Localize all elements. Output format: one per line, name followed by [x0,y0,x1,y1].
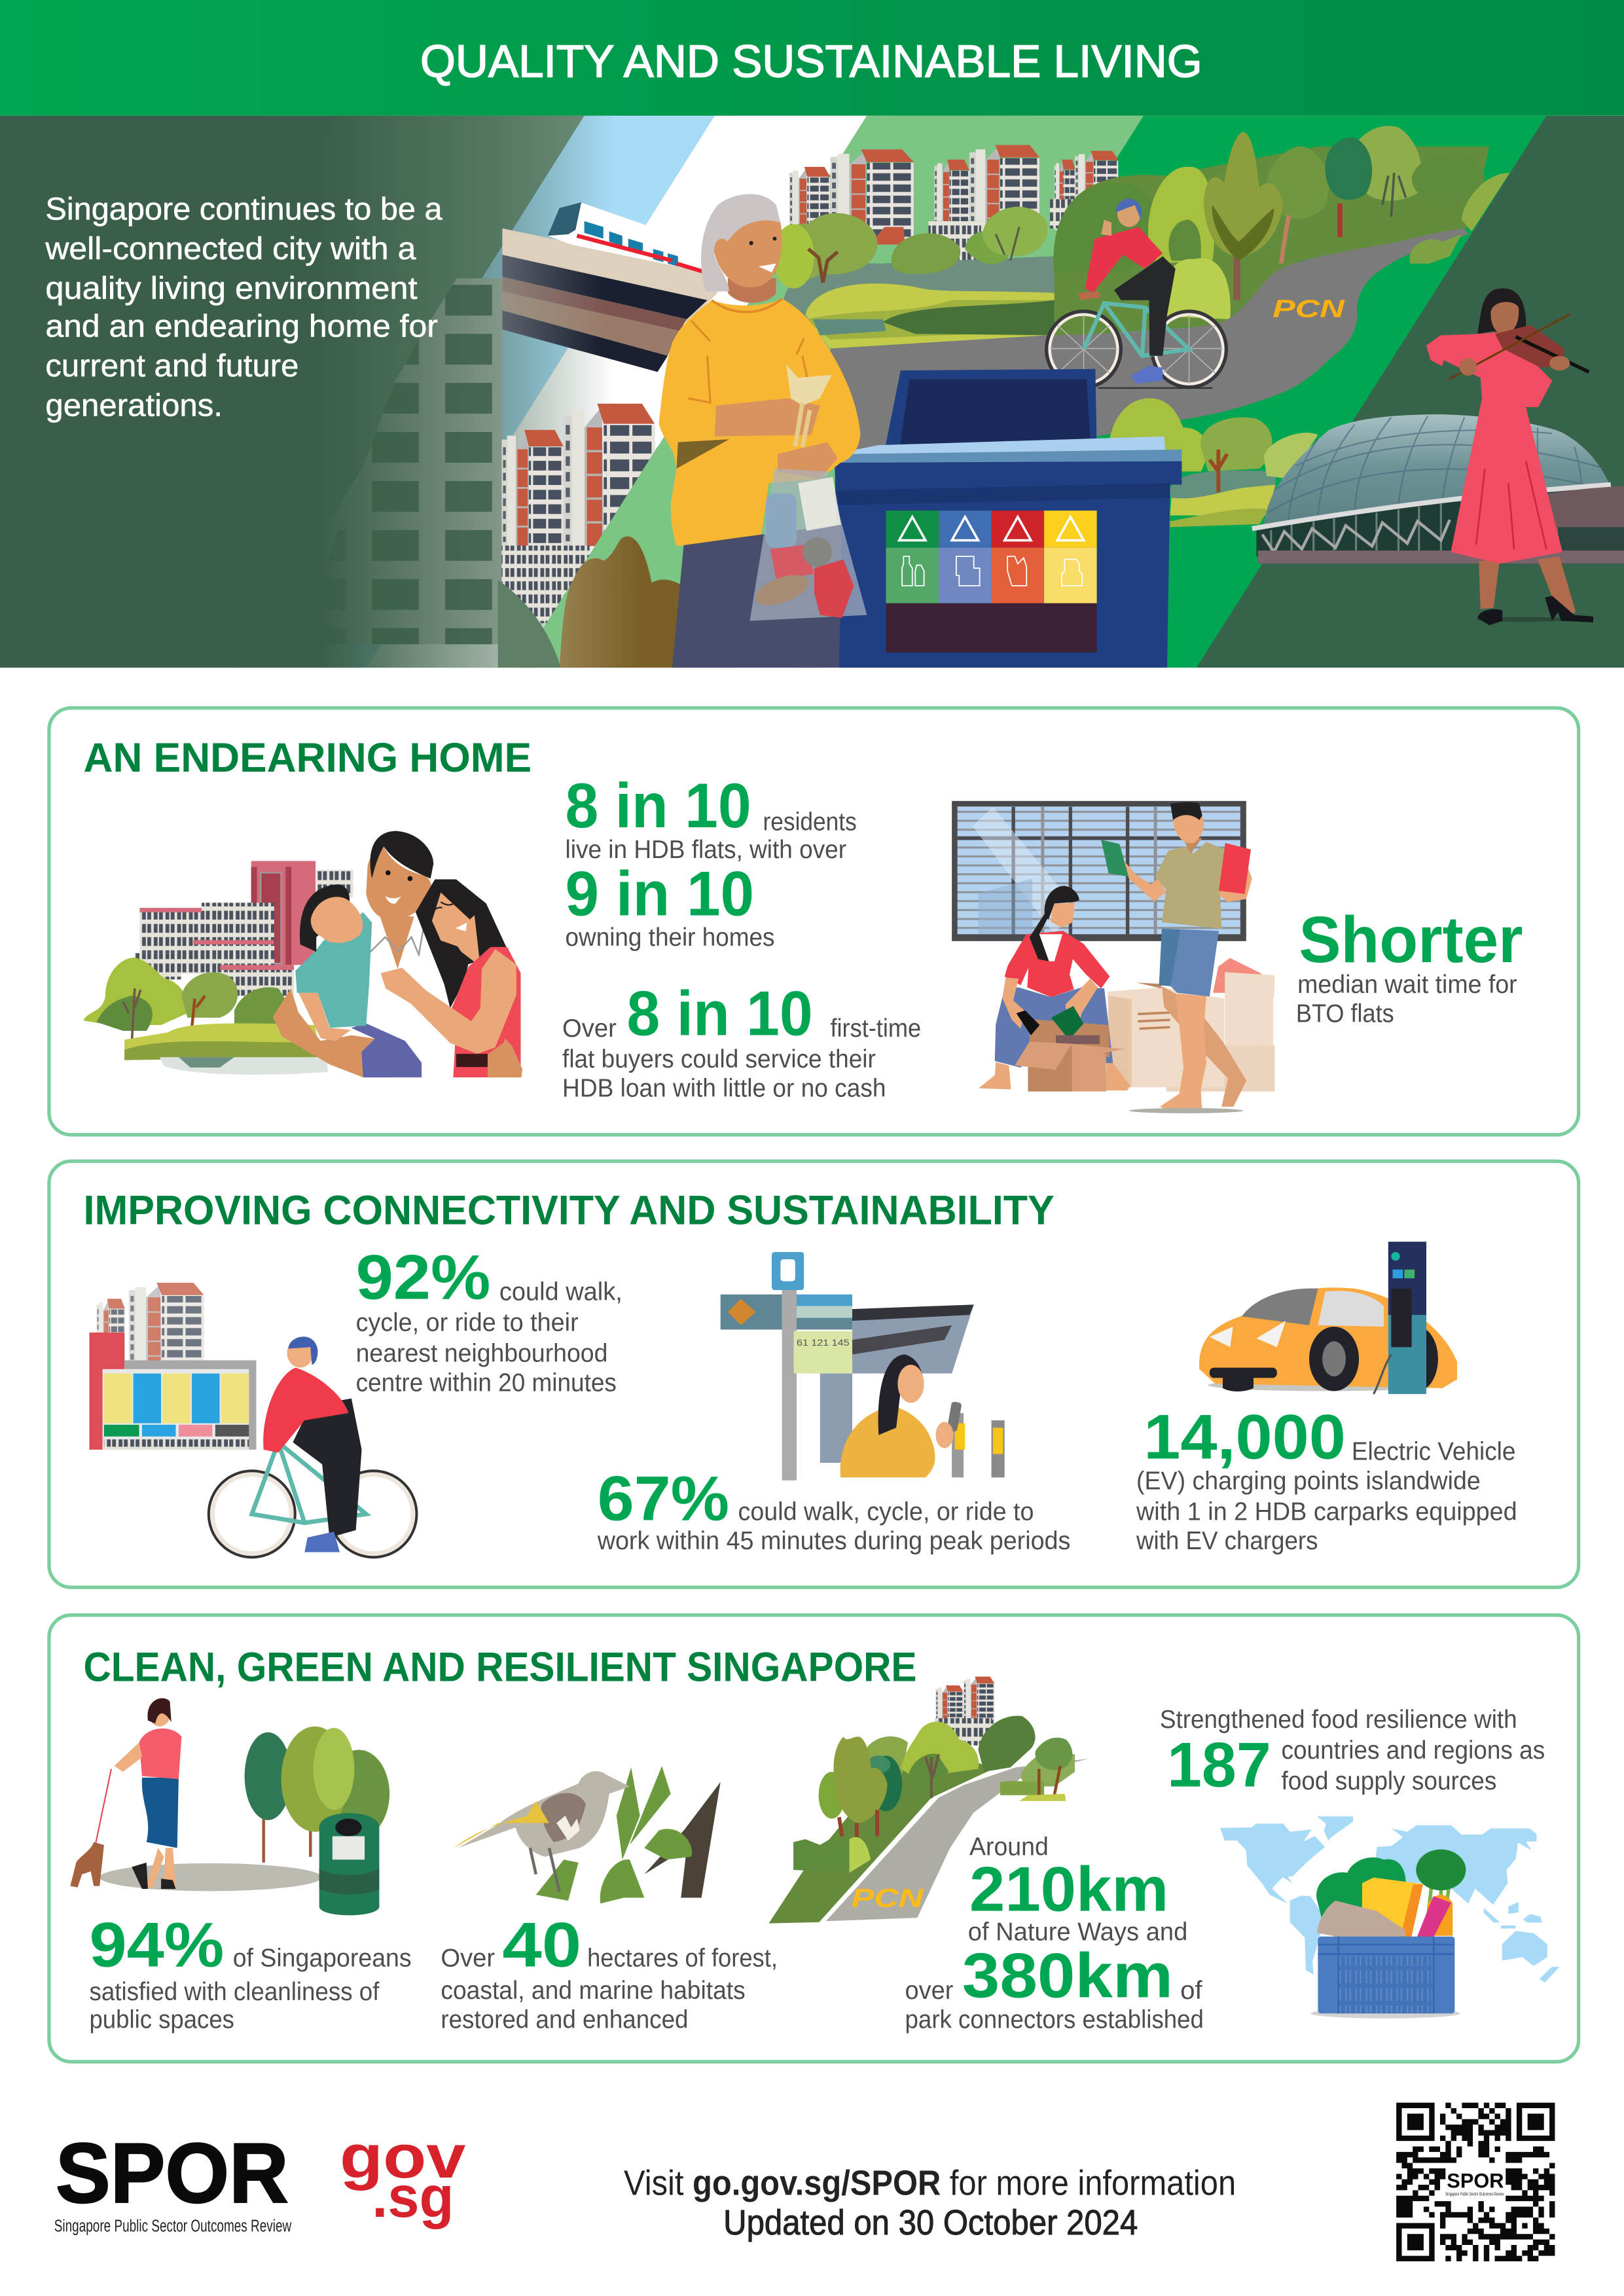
illustration: bus stop and commuter [721,1252,1005,1480]
cyclist on road [1047,199,1225,388]
stat: over 8 in 10 first-time buyers [562,979,921,1103]
panel: improving connectivity and sustainability [49,1161,1579,1587]
stat: 8 in 10 residents: 8 in 10 [566,771,751,841]
stat: 67%: 67% [598,1463,729,1534]
stat: 67%: work within 45 minutes during peak periods [597,1527,1070,1555]
logo: gov.sg: .sg [372,2164,454,2229]
heading: clean, green and resilient: CLEAN, GREEN AND RESILIENT SINGAPORE [84,1644,916,1690]
stat: 14,000 EV charging points: Electric Vehicle [1352,1438,1515,1466]
stat: 92%: cycle, or ride to their [356,1309,579,1337]
stat: over 8 in 10 first-time buyers: flat buyers could service their [562,1045,876,1073]
intro text: well-connected city with a [45,231,416,266]
illustration: neighbourhood centre and cyclist [89,1283,416,1557]
stat: over 8 in 10 first-time buyers: HDB loan with little or no cash [562,1075,886,1103]
hero illustration [0,116,1624,668]
stat: 94%: satisfied with cleanliness of [89,1978,380,2006]
road [830,228,1469,463]
stat: 187 food supply sources: Strengthened food resilience with [1160,1706,1517,1734]
footer information [624,2164,1236,2242]
intro text [45,192,442,423]
bushes behind bin [1108,399,1318,527]
PCN road marking: PCN [852,1884,924,1913]
stat: 187 food supply sources: food supply sources [1282,1767,1496,1795]
footer information: Updated on 30 October 2024 [723,2203,1138,2242]
stat: shorter BTO wait time: BTO flats [1296,1000,1394,1028]
olive fade tree [498,580,561,668]
grandmother holding bag [659,194,867,668]
stat: 187 food supply sources [1160,1706,1545,1800]
stat: 67%: could walk, cycle, or ride to [738,1498,1034,1526]
stat: 187 food supply sources: 187 [1167,1730,1271,1800]
QR code [1396,2106,1555,2259]
stat: 14,000 EV charging points: with EV chargers [1136,1527,1318,1555]
stat: shorter BTO wait time: median wait time for [1297,971,1517,999]
title: QUALITY AND SUSTAINABLE LIVING [420,35,1202,86]
panel: an endearing home [49,708,1579,1135]
stat: 14,000 EV charging points [1136,1402,1517,1555]
stat: 8 in 10 residents: residents [763,808,857,836]
stat: over 40 hectares: coastal, and marine habitats [441,1977,746,2005]
stat: 94%: public spaces [89,2006,234,2034]
park trees and greenery behind road [772,207,1193,351]
stat: 92% [356,1242,623,1397]
logo: gov.sg: gov [340,2122,465,2191]
stat: 67% [597,1463,1070,1555]
stat: shorter BTO wait time: Shorter [1299,903,1523,977]
intro text: quality living environment [45,270,418,306]
illustration: bus stop and commuter: 61 121 145 [797,1338,850,1348]
stat: 8 in 10 residents: live in HDB flats, with over [566,836,846,864]
bush beside road [1410,234,1462,264]
stat: 14,000 EV charging points: with 1 in 2 HDB carparks equipped [1136,1498,1517,1526]
stat: 210km nature ways and 380km park connectors: park connectors established [905,2006,1204,2034]
stat: 14,000 EV charging points: 14,000 [1144,1402,1346,1472]
lower-left HDB blocks [501,404,655,623]
illustration: world map with food crate [1220,1816,1560,2018]
recycling category labels [886,511,1097,653]
stat: over 40 hectares [441,1910,778,2034]
intro text: current and future [45,348,298,384]
violinist [1426,289,1593,625]
left fade overlay [0,116,615,668]
stat: 92%: could walk, [499,1278,623,1306]
stat: 210km nature ways and 380km park connectors: Around [969,1833,1049,1861]
HDB towers on top [789,145,1118,260]
stat: over 8 in 10 first-time buyers: 8 in 10 [627,979,813,1049]
light-green strip foreground [543,446,659,664]
stat: 94% [89,1910,412,2034]
stat: 92%: nearest neighbourhood [356,1340,607,1368]
illustration: bird on branch [454,1766,721,1903]
illustration: family with HDB flats [84,831,522,1077]
stat: 210km nature ways and 380km park connectors: over [905,1977,953,2005]
illustration: couple moving into new flat [952,801,1274,1113]
stat: 92%: 92% [356,1242,490,1312]
stat: over 40 hectares: hectares of forest, [587,1945,778,1973]
stat: 210km nature ways and 380km park connectors: of Nature Ways and [968,1918,1187,1946]
stat: over 8 in 10 first-time buyers: Over [562,1014,617,1043]
illustration: park connector with trees [769,1677,1089,1924]
stat: 9 in 10 owning: 9 in 10 [566,859,754,929]
stat: 210km nature ways and 380km park connectors: 210km [969,1855,1168,1925]
stat: 210km nature ways and 380km park connectors: of [1180,1977,1202,2005]
intro text: and an endearing home for [45,309,438,344]
logo: gov.sg [340,2122,465,2229]
stat: 8 in 10 residents [566,771,857,864]
QR centre logo: Singapore Public Sector Outcomes Review [1445,2192,1504,2197]
stat: over 40 hectares: Over [441,1945,495,1973]
intro text: Singapore continues to be a [45,192,442,227]
stat: shorter BTO wait time [1296,903,1523,1028]
clear bag with recyclables [749,365,867,621]
illustration: woman walking dog, trees and bin [70,1698,389,1915]
stat: 94%: of Singaporeans [233,1945,412,1973]
big trees on the right [1053,126,1510,337]
stat: 187 food supply sources: countries and regions as [1282,1736,1545,1765]
stat: 94%: 94% [89,1910,224,1981]
stat: 9 in 10 owning: owning their homes [566,924,774,952]
logo: SPOR: SPOR [56,2126,289,2221]
logo: SPOR: Singapore Public Sector Outcomes Review [54,2217,292,2236]
intro text: generations. [45,387,223,423]
header banner [0,0,1624,116]
stat: over 40 hectares: restored and enhanced [441,2006,688,2034]
stat: 14,000 EV charging points: (EV) charging points islandwide [1136,1467,1481,1495]
faded grey building [338,278,503,644]
stat: over 40 hectares: 40 [502,1910,581,1981]
QR centre logo: SPOR [1447,2169,1504,2192]
brown foreground tree [560,537,683,668]
heading: an endearing home: AN ENDEARING HOME [84,735,532,781]
stat: 210km nature ways and 380km park connectors: 380km [962,1941,1173,2011]
illustration: electric car and charger [1199,1242,1457,1394]
viaduct and MRT train [502,202,717,372]
Esplanade dome [1252,414,1624,564]
panel: clean, green and resilient Singapore [49,1615,1579,2062]
footer information: Visit go.gov.sg/SPOR for more information [624,2164,1236,2203]
PCN road marking: PCN [1272,295,1346,323]
stat: over 8 in 10 first-time buyers: first-time [830,1014,921,1043]
heading: improving connectivity: IMPROVING CONNECTIVITY AND SUSTAINABILITY [84,1187,1055,1233]
stat: 210km nature ways and 380km park connectors [905,1833,1204,2034]
recycling bin [835,369,1182,668]
stat: 92%: centre within 20 minutes [356,1369,617,1397]
